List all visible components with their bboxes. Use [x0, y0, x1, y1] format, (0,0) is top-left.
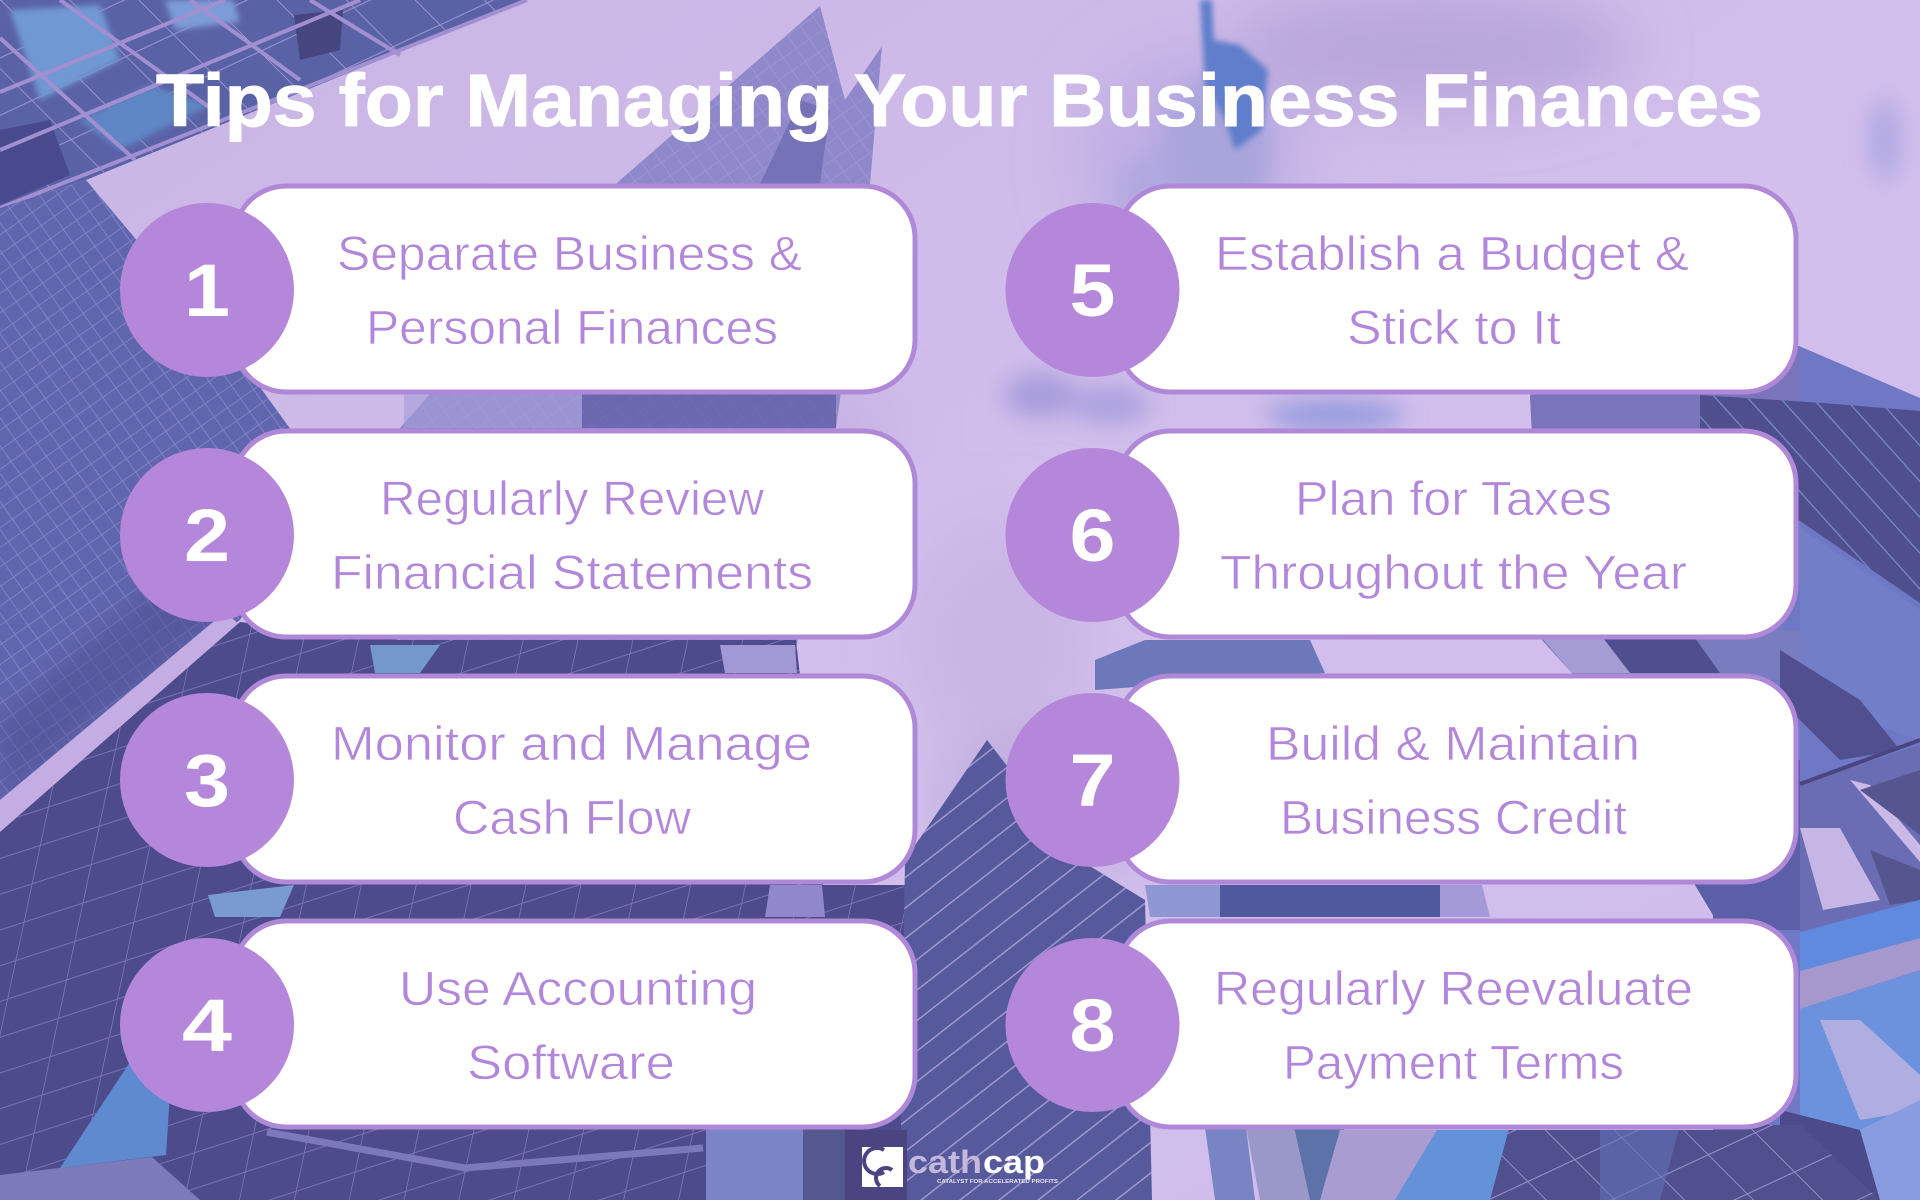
tip 4: Software	[467, 1037, 675, 1090]
tip 7: 7	[1070, 739, 1116, 822]
tip 1: 1	[184, 249, 230, 332]
tip 6: Throughout the Year	[1220, 547, 1687, 600]
tip 2	[120, 431, 915, 637]
top centre tower	[400, 6, 882, 650]
tip 3: Cash Flow	[453, 792, 691, 845]
tip 1: Personal Finances	[366, 302, 778, 355]
logo: cathcap	[845, 1130, 1059, 1200]
tip 1: Separate Business &	[337, 228, 802, 281]
logo: cathcap: cap	[983, 1144, 1045, 1180]
tip 3: 3	[184, 739, 230, 822]
tip 1	[120, 186, 915, 392]
right buildings	[1300, 340, 1920, 1200]
tip 5	[1006, 186, 1796, 392]
tip 8: Payment Terms	[1283, 1037, 1624, 1090]
logo: cathcap: cath	[908, 1144, 982, 1180]
lower-left building	[0, 622, 905, 1200]
tip 7: Build & Maintain	[1266, 718, 1640, 771]
tip 7: Business Credit	[1280, 792, 1627, 845]
central dark tower	[900, 740, 1152, 1200]
tip 2: Financial Statements	[331, 547, 813, 600]
logo: cathcap: CATALYST FOR ACCELERATED PROFITS	[937, 1179, 1059, 1185]
tip 5: 5	[1070, 249, 1116, 332]
tip 6	[1006, 431, 1796, 637]
top-left building	[0, 0, 527, 208]
tip 4: 4	[182, 984, 232, 1067]
tip 3: Monitor and Manage	[331, 718, 812, 771]
tip 8: 8	[1070, 984, 1116, 1067]
tip 3	[120, 676, 915, 882]
tip 8	[1006, 921, 1796, 1127]
title: Tips for Managing Your Business Finances	[156, 59, 1763, 142]
tip 5: Stick to It	[1347, 302, 1561, 355]
distant mid buildings	[1095, 640, 1490, 1200]
tip 2: Regularly Review	[380, 473, 764, 526]
left tower	[0, 180, 320, 805]
tip 8: Regularly Reevaluate	[1214, 963, 1693, 1016]
tip 7	[1006, 676, 1796, 882]
tip 2: 2	[184, 494, 230, 577]
tip 5: Establish a Budget &	[1215, 228, 1689, 281]
tip 6: 6	[1070, 494, 1116, 577]
tip 6: Plan for Taxes	[1295, 473, 1612, 526]
tip 4: Use Accounting	[399, 963, 757, 1016]
light diagonal strip	[0, 612, 240, 832]
tip 4	[120, 921, 915, 1127]
